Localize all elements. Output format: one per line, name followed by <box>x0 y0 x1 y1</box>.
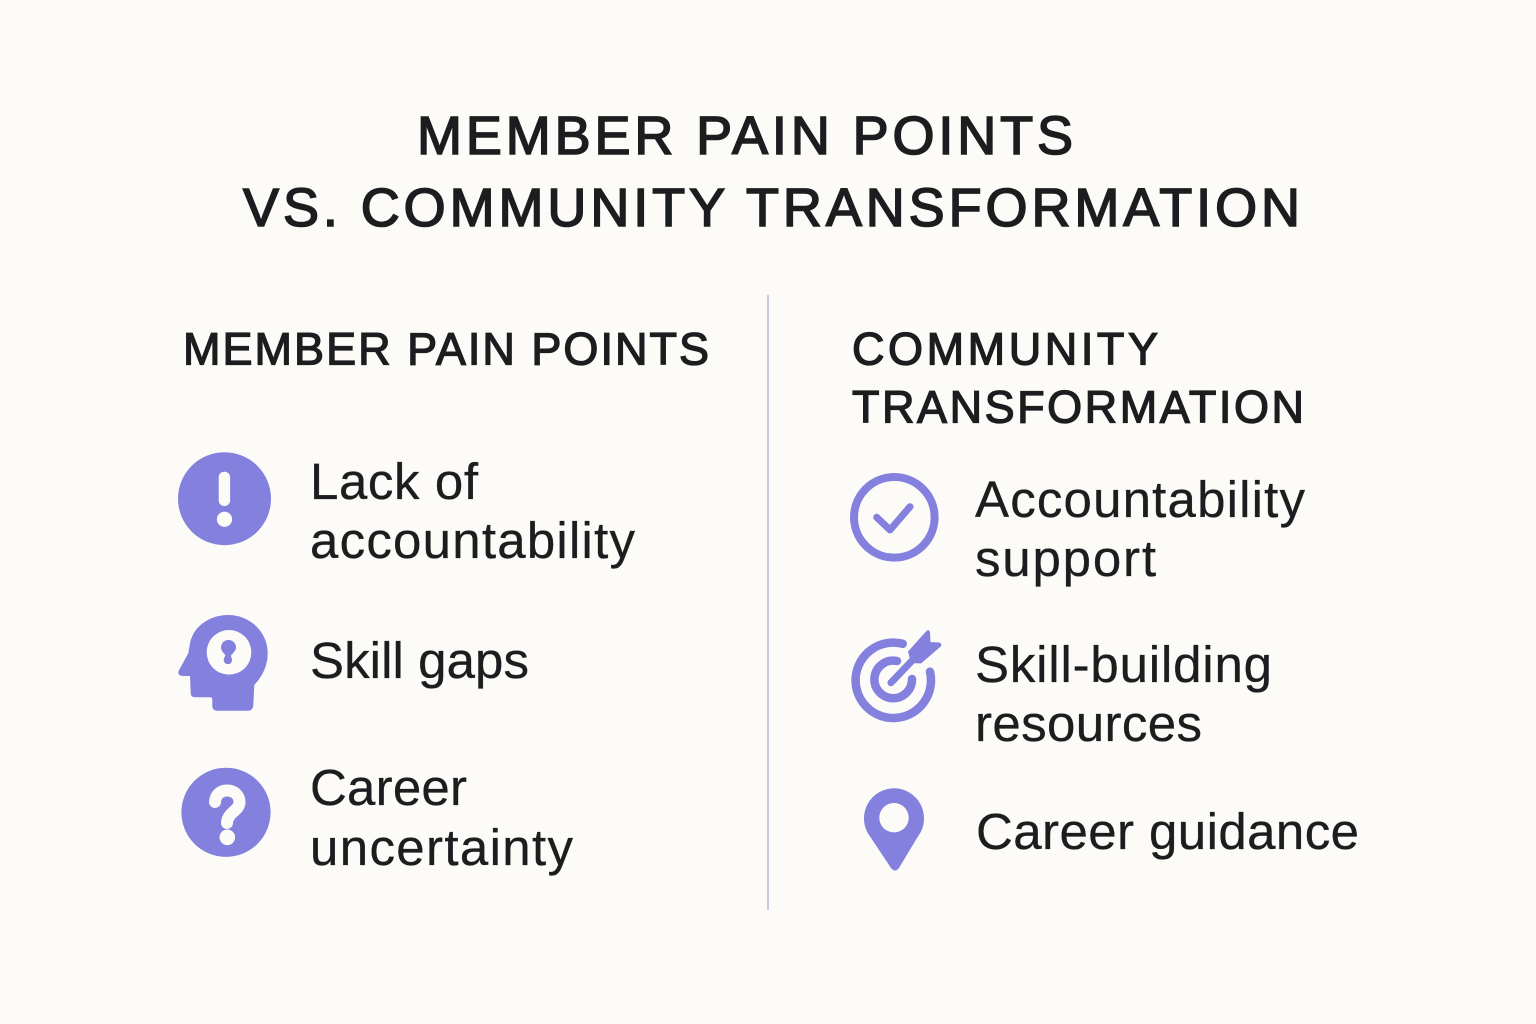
text: skill-building resources <box>975 636 1272 752</box>
icon: question mark circle <box>181 768 271 857</box>
text: accountability support: Accountability <box>975 471 1306 528</box>
panel: community transformation <box>852 324 1359 870</box>
text: career uncertainty: Career <box>310 759 467 816</box>
text: skill gaps: Skill gaps <box>310 632 529 689</box>
heading: community transformation <box>852 324 1304 432</box>
text: accountability support: support <box>975 530 1156 587</box>
text: lack of accountability: accountability <box>310 512 636 569</box>
text: lack of accountability: Lack of <box>310 453 479 510</box>
heading: community transformation: COMMUNITY <box>852 324 1158 374</box>
text: lack of accountability <box>310 453 636 569</box>
icon: exclamation circle <box>178 452 271 545</box>
text: career uncertainty: uncertainty <box>310 819 574 876</box>
icon: head with question mark <box>178 615 268 711</box>
icon: check circle <box>854 477 935 558</box>
text: skill-building resources: resources <box>975 695 1202 752</box>
text: career guidance: Career guidance <box>976 803 1359 860</box>
title: VS. COMMUNITY TRANSFORMATION <box>243 178 1300 238</box>
text: accountability support <box>975 471 1306 587</box>
heading: community transformation: TRANSFORMATION <box>852 382 1304 432</box>
text: career uncertainty <box>310 759 574 876</box>
panel: member pain points <box>178 324 709 876</box>
text: skill-building resources: Skill-building <box>975 636 1272 693</box>
title <box>243 106 1300 238</box>
icon: location pin <box>864 788 924 870</box>
icon: target with arrow <box>856 630 941 718</box>
heading: member pain points: MEMBER PAIN POINTS <box>183 324 709 374</box>
title: MEMBER PAIN POINTS <box>417 106 1073 166</box>
